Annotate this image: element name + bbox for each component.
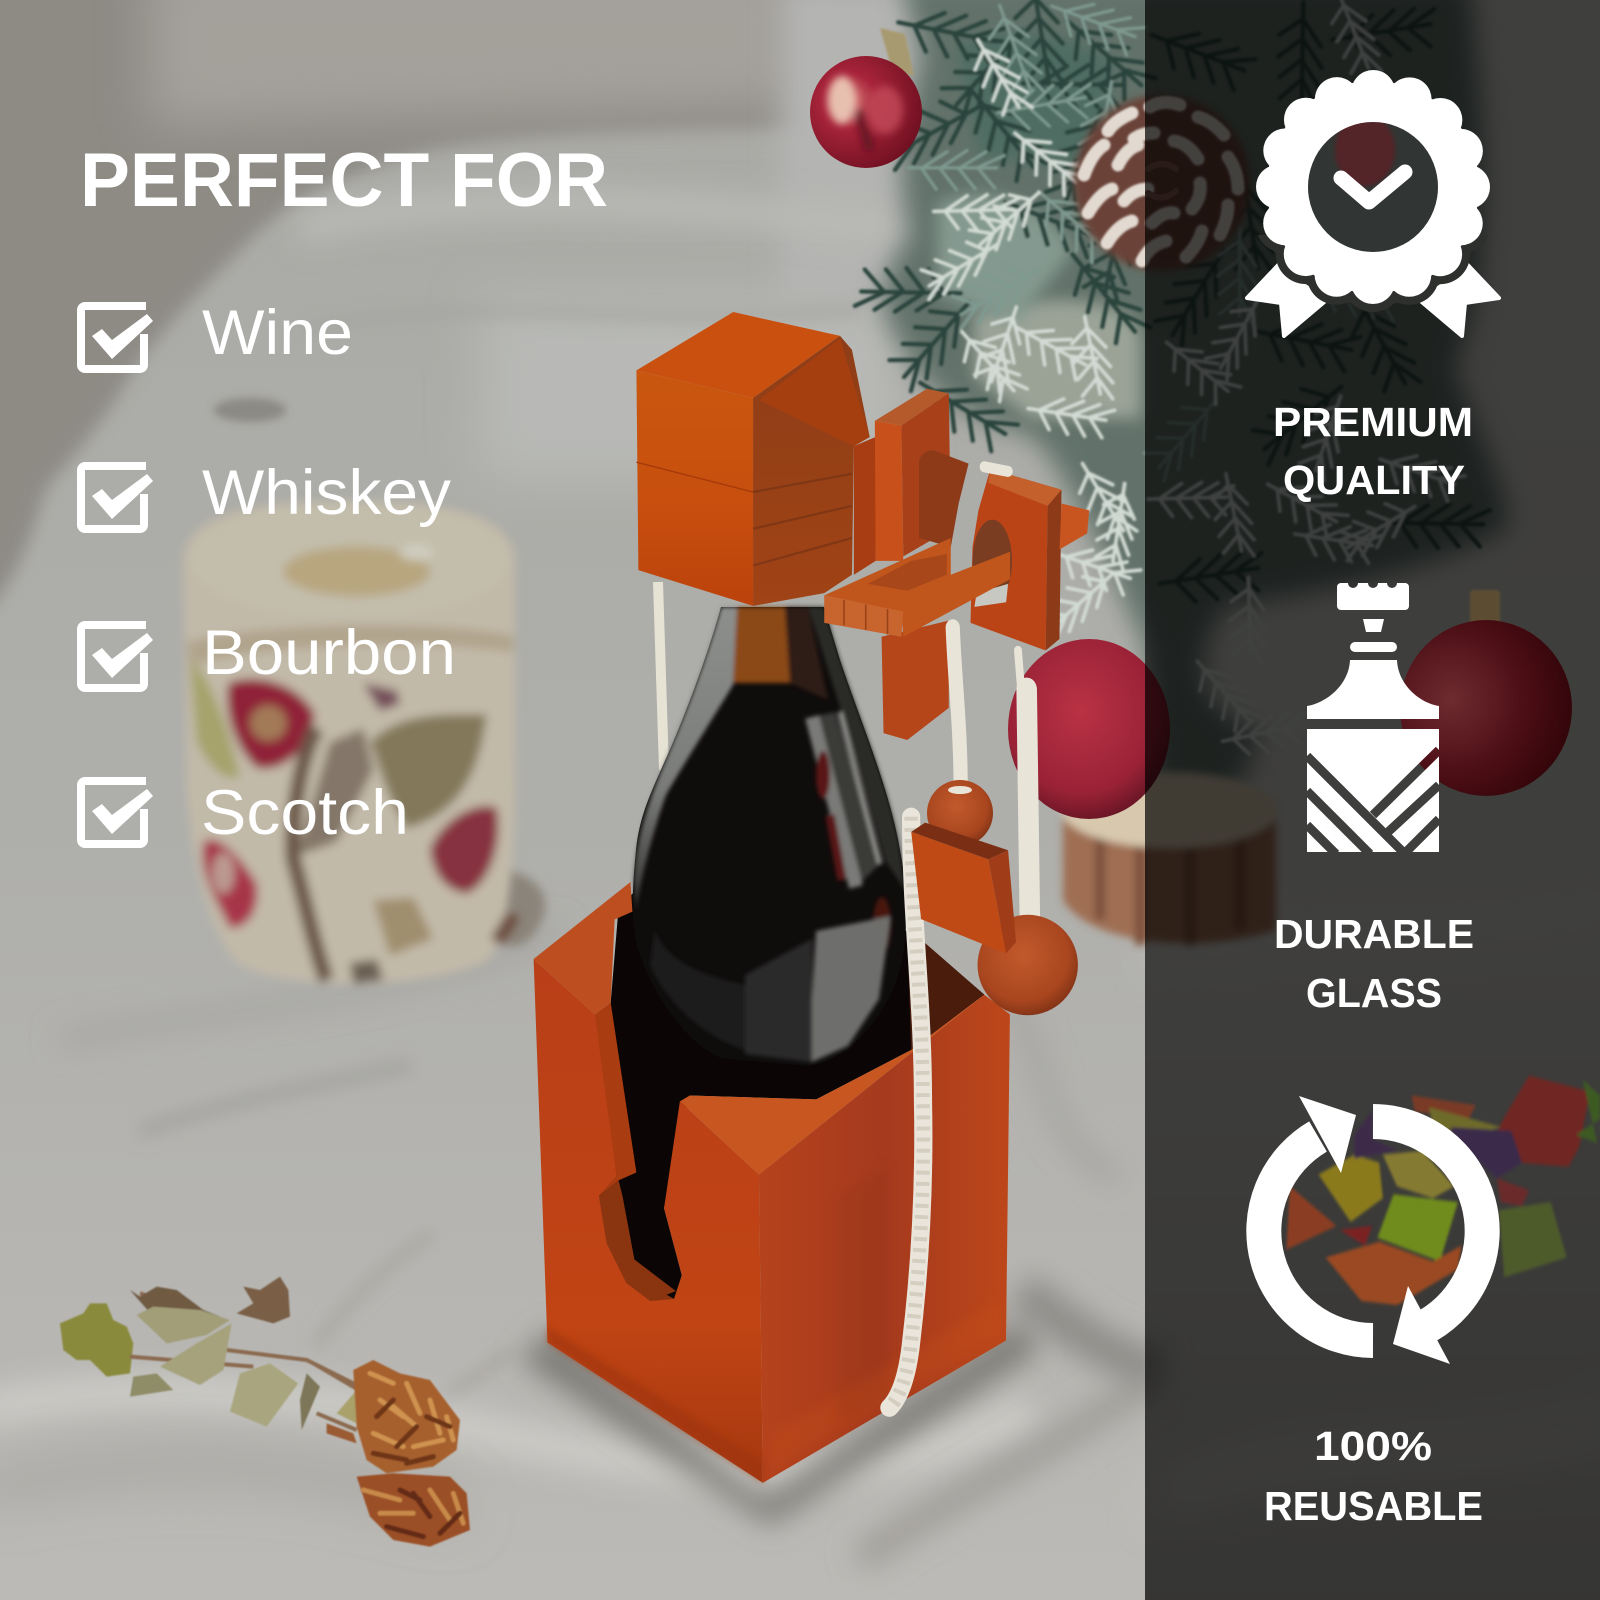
list: scotch: Scotch — [201, 778, 409, 848]
product: left string — [658, 582, 664, 770]
candle with pressed flowers — [183, 501, 545, 983]
product: long white rope — [889, 817, 923, 1408]
label: premium quality: PREMIUM — [1273, 399, 1473, 445]
product: wooden cube top — [636, 312, 870, 606]
product: wooden base box — [534, 882, 1010, 1483]
product: box cavity — [599, 892, 984, 1303]
dark translucent side panel — [1145, 0, 1600, 1600]
icon: quality badge — [1247, 87, 1499, 336]
list: scotch — [81, 778, 409, 848]
list: bourbon: Bourbon — [202, 618, 456, 688]
list: wine — [81, 298, 353, 369]
product: wooden lock pieces — [824, 389, 1089, 740]
heading: PERFECT FOR — [80, 138, 608, 223]
dried flowers — [60, 1277, 470, 1547]
pine cone — [1074, 95, 1250, 271]
label: 100% reusable: REUSABLE — [1264, 1483, 1483, 1529]
candies on panel — [1286, 1076, 1600, 1305]
icon: decanter — [1307, 583, 1439, 852]
dim red ornament on panel — [1400, 590, 1572, 796]
label: premium quality: QUALITY — [1283, 457, 1465, 503]
list: wine: Wine — [202, 298, 353, 368]
label: durable glass — [1274, 911, 1474, 1016]
product: hanging strings — [953, 467, 1030, 919]
product: wooden bead — [927, 780, 993, 846]
product: wooden ball and small block — [911, 823, 1078, 1015]
list: whiskey — [81, 458, 452, 529]
list: whiskey: Whiskey — [202, 458, 452, 528]
product: glass bottle — [633, 607, 906, 1066]
list: bourbon — [81, 618, 456, 688]
label: premium quality — [1273, 399, 1473, 503]
christmas tree — [852, 0, 1508, 816]
red ornament top — [810, 28, 922, 168]
label: durable glass: GLASS — [1306, 970, 1442, 1016]
log stump — [1062, 772, 1278, 945]
label: 100% reusable — [1264, 1423, 1483, 1529]
label: 100% reusable: 100% — [1314, 1423, 1432, 1469]
label: durable glass: DURABLE — [1274, 911, 1474, 957]
big red ornament — [1008, 639, 1170, 819]
icon: reuse arrows — [1264, 1096, 1482, 1364]
small hidden ornament behind badge — [1335, 114, 1395, 186]
box shadow on cloth — [520, 1320, 1040, 1525]
